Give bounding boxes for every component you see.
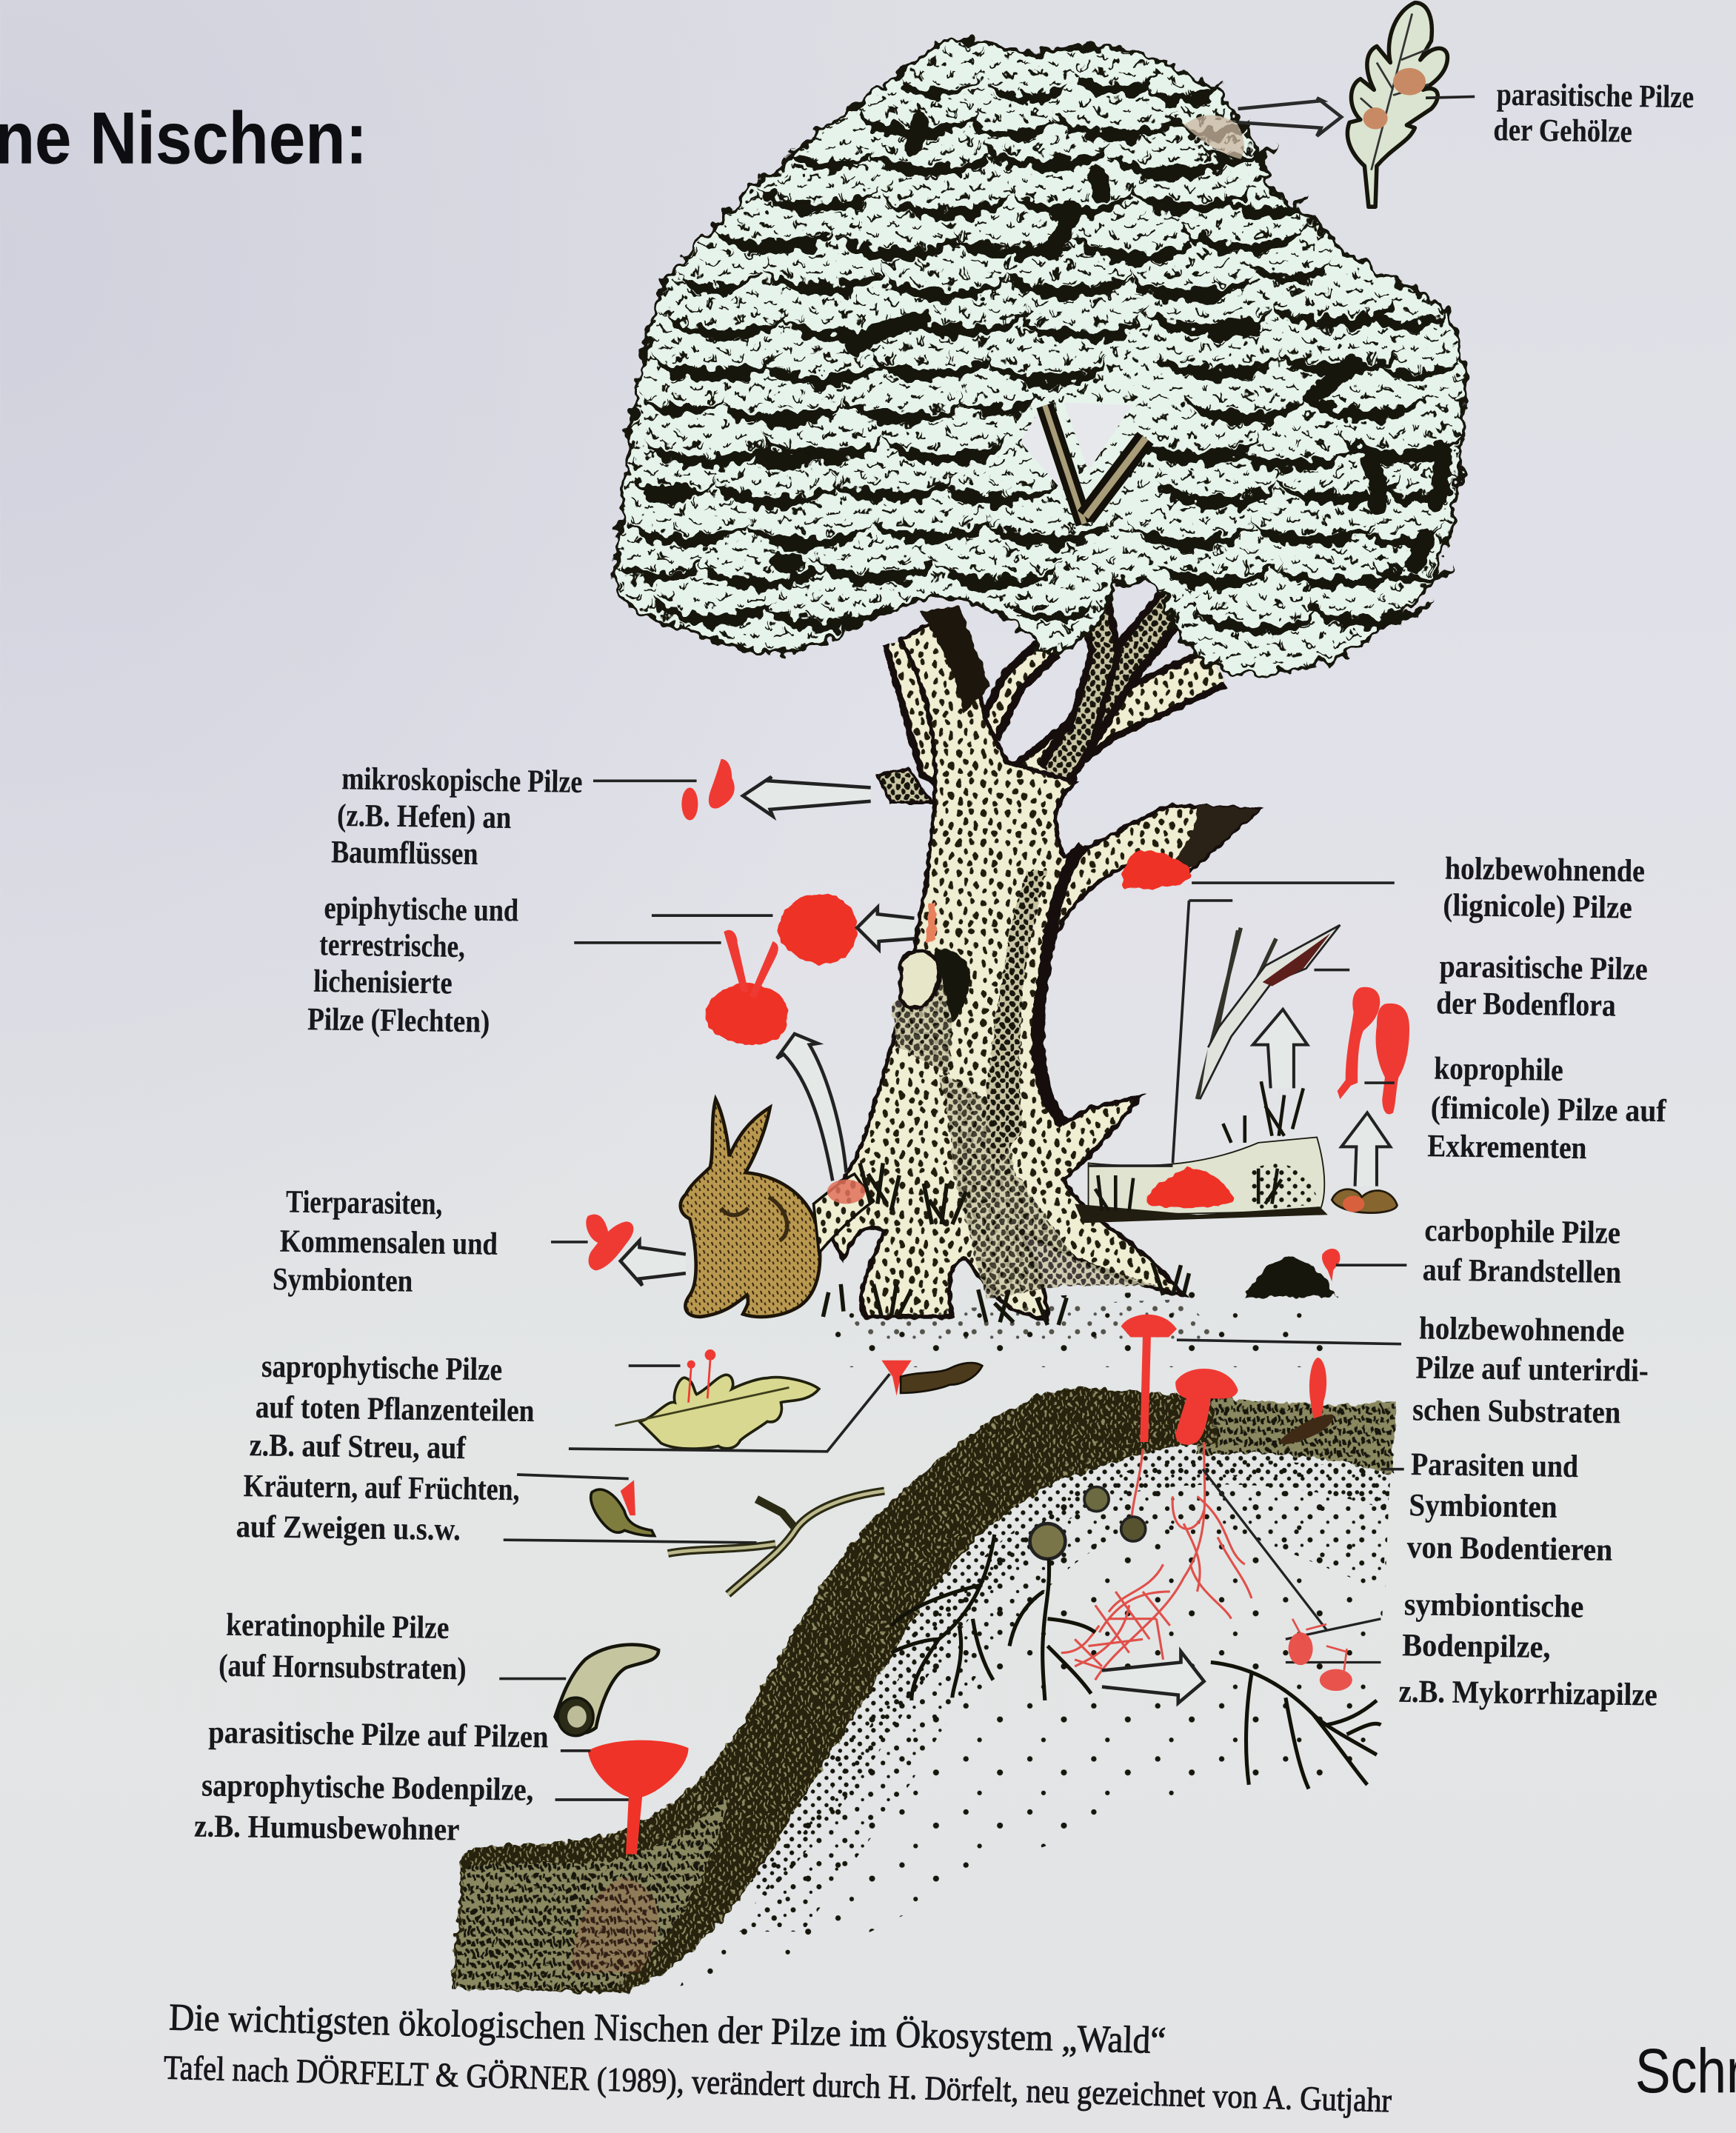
label: holzbewohnende lignicole Pilze	[1443, 852, 1645, 926]
label: Tierparasiten: Kommensalen und	[280, 1224, 498, 1262]
label: holzbewohnende Pilze auf unterirdischen Substraten: Pilze auf unterirdi-	[1415, 1351, 1649, 1389]
label: holzbewohnende lignicole Pilze: (lignicole) Pilze	[1443, 888, 1632, 926]
label: holzbewohnende lignicole Pilze: holzbewohnende	[1445, 852, 1645, 889]
label: keratinophile Pilze: keratinophile Pilze	[226, 1608, 450, 1646]
label: parasitische Pilze der Bodenflora: parasitische Pilze	[1439, 949, 1648, 987]
label: Tierparasiten: Symbionten	[273, 1262, 413, 1299]
label: symbiontische Bodenpilze: symbiontische	[1404, 1587, 1584, 1625]
label: saprophytische Bodenpilze: saprophytische Bodenpilze,	[201, 1768, 534, 1808]
label: saprophytische Bodenpilze: z.B. Humusbewohner	[194, 1809, 460, 1847]
label: koprophile Pilze: koprophile	[1434, 1052, 1563, 1088]
label: saprophytische Bodenpilze	[194, 1768, 534, 1849]
arrow to stems	[1253, 1009, 1307, 1088]
soil cross-section	[452, 1387, 1396, 1993]
label: saprophytische Pilze auf toten Pflanzenteilen: auf Zweigen u.s.w.	[236, 1509, 461, 1547]
label: saprophytische Pilze auf toten Pflanzenteilen: Kräutern, auf Früchten,	[243, 1469, 520, 1507]
label: Flechten: Pilze (Flechten)	[307, 1002, 490, 1040]
animal parasites	[551, 1215, 686, 1286]
label: Parasiten und Symbionten	[1407, 1447, 1614, 1568]
label: parasitische Pilze der Bodenflora: der Bodenflora	[1436, 986, 1616, 1024]
label: mikroskopische Pilze: Baumflüssen	[331, 835, 478, 872]
label: symbiontische Bodenpilze: Bodenpilze,	[1402, 1628, 1551, 1665]
sky gaps and upper branches	[1021, 403, 1146, 524]
label: saprophytische Pilze auf toten Pflanzenteilen: z.B. auf Streu, auf	[250, 1428, 467, 1466]
ground and grass beneath tree	[803, 1163, 1361, 1367]
soil animal burrows and roots	[891, 1469, 1404, 1789]
label: parasitische Pilze der Gehölze	[1493, 77, 1694, 150]
label: carbophile Pilze	[1423, 1213, 1622, 1290]
acorn with fungus	[517, 1475, 655, 1536]
caption: Tafel nach DÖRFELT & GÖRNER (1989), verändert durch H. Dörfelt, neu gezeichnet von A. Gutjahr	[163, 2049, 1392, 2119]
label: holzbewohnende Pilze auf unterirdischen Substraten: holzbewohnende	[1419, 1311, 1625, 1349]
microscopic fungi	[593, 759, 871, 821]
label: symbiontische Bodenpilze	[1398, 1587, 1659, 1713]
arrow to coprophilous fungi	[1341, 1112, 1390, 1186]
cup fungus	[555, 1740, 689, 1854]
coprophilous fungi	[1332, 987, 1409, 1213]
label: mikroskopische Pilze	[331, 761, 583, 873]
label: koprophile Pilze: (fimicole) Pilze auf	[1431, 1091, 1667, 1129]
horn substrate	[499, 1645, 658, 1736]
label: parasitische Pilze der Gehölze: der Gehölze	[1493, 113, 1632, 150]
slide title fragment: ne Nischen:	[0, 97, 367, 179]
label: mikroskopische Pilze: mikroskopische Pilze	[341, 761, 583, 800]
label: carbophile Pilze: carbophile Pilze	[1424, 1213, 1620, 1251]
label: saprophytische Pilze auf toten Pflanzenteilen	[236, 1349, 535, 1549]
label: parasitische Pilze der Gehölze: parasitische Pilze	[1496, 77, 1694, 115]
label: keratinophile Pilze: (auf Hornsubstraten)	[218, 1649, 467, 1686]
carbophilous fungus on burn site	[1245, 1249, 1406, 1298]
parasite patch on canopy	[1184, 115, 1244, 159]
label: Flechten: terrestrische,	[319, 927, 465, 964]
label: holzbewohnende Pilze auf unterirdischen Substraten	[1412, 1311, 1649, 1431]
label: Tierparasiten	[273, 1184, 498, 1300]
label: koprophile Pilze	[1427, 1051, 1667, 1167]
arrow to oak leaf	[1238, 98, 1341, 136]
label: Flechten: lichenisierte	[313, 964, 453, 1001]
label: Flechten	[307, 891, 518, 1040]
lichens	[574, 893, 914, 1181]
tree trunk and branches	[816, 578, 1258, 1320]
label: koprophile Pilze: Exkrementen	[1427, 1129, 1587, 1166]
label: Parasiten und Symbionten: von Bodentieren	[1407, 1530, 1612, 1568]
label: Parasiten und Symbionten: Symbionten	[1409, 1488, 1558, 1525]
oak leaf with parasitic fungi	[1347, 3, 1447, 207]
ground flora mound with fungus	[1075, 901, 1328, 1223]
canopy silhouette and leaf crescents	[615, 41, 1463, 673]
label: mikroskopische Pilze: (z.B. Hefen) an	[337, 798, 512, 835]
label: saprophytische Pilze auf toten Pflanzenteilen: saprophytische Pilze	[261, 1349, 502, 1387]
label: keratinophile Pilze	[218, 1608, 467, 1686]
tree canopy	[615, 41, 1463, 673]
label: Flechten: epiphytische und	[324, 891, 518, 928]
canopy shadow bands	[653, 120, 1442, 565]
twig	[504, 1491, 884, 1595]
parasitic fungi on ground flora stems	[1197, 925, 1349, 1099]
dead oak leaf with saprophytic fungi	[569, 1349, 982, 1452]
caption	[163, 1996, 1392, 2119]
rabbit	[681, 1099, 873, 1317]
label: symbiontische Bodenpilze: z.B. Mykorrhizapilze	[1398, 1675, 1657, 1713]
label: parasitische Pilze auf Pilzen: parasitische Pilze auf Pilzen	[208, 1715, 549, 1755]
label: parasitische Pilze der Bodenflora	[1436, 949, 1648, 1024]
caption: Die wichtigsten ökologischen Nischen der Pilze im Ökosystem „Wald“	[169, 1996, 1166, 2062]
underground fungi with mycelium	[1061, 1315, 1401, 1680]
label: saprophytische Pilze auf toten Pflanzenteilen: auf toten Pflanzenteilen	[256, 1390, 535, 1429]
label: carbophile Pilze: auf Brandstellen	[1423, 1252, 1621, 1290]
label line: parasitic fungi on trees	[1426, 96, 1475, 98]
label: Tierparasiten: Tierparasiten,	[286, 1185, 443, 1221]
label: holzbewohnende Pilze auf unterirdischen Substraten: schen Substraten	[1412, 1392, 1621, 1430]
label: Parasiten und Symbionten: Parasiten und	[1411, 1447, 1578, 1484]
wood-inhabiting bracket fungus	[1122, 850, 1395, 889]
